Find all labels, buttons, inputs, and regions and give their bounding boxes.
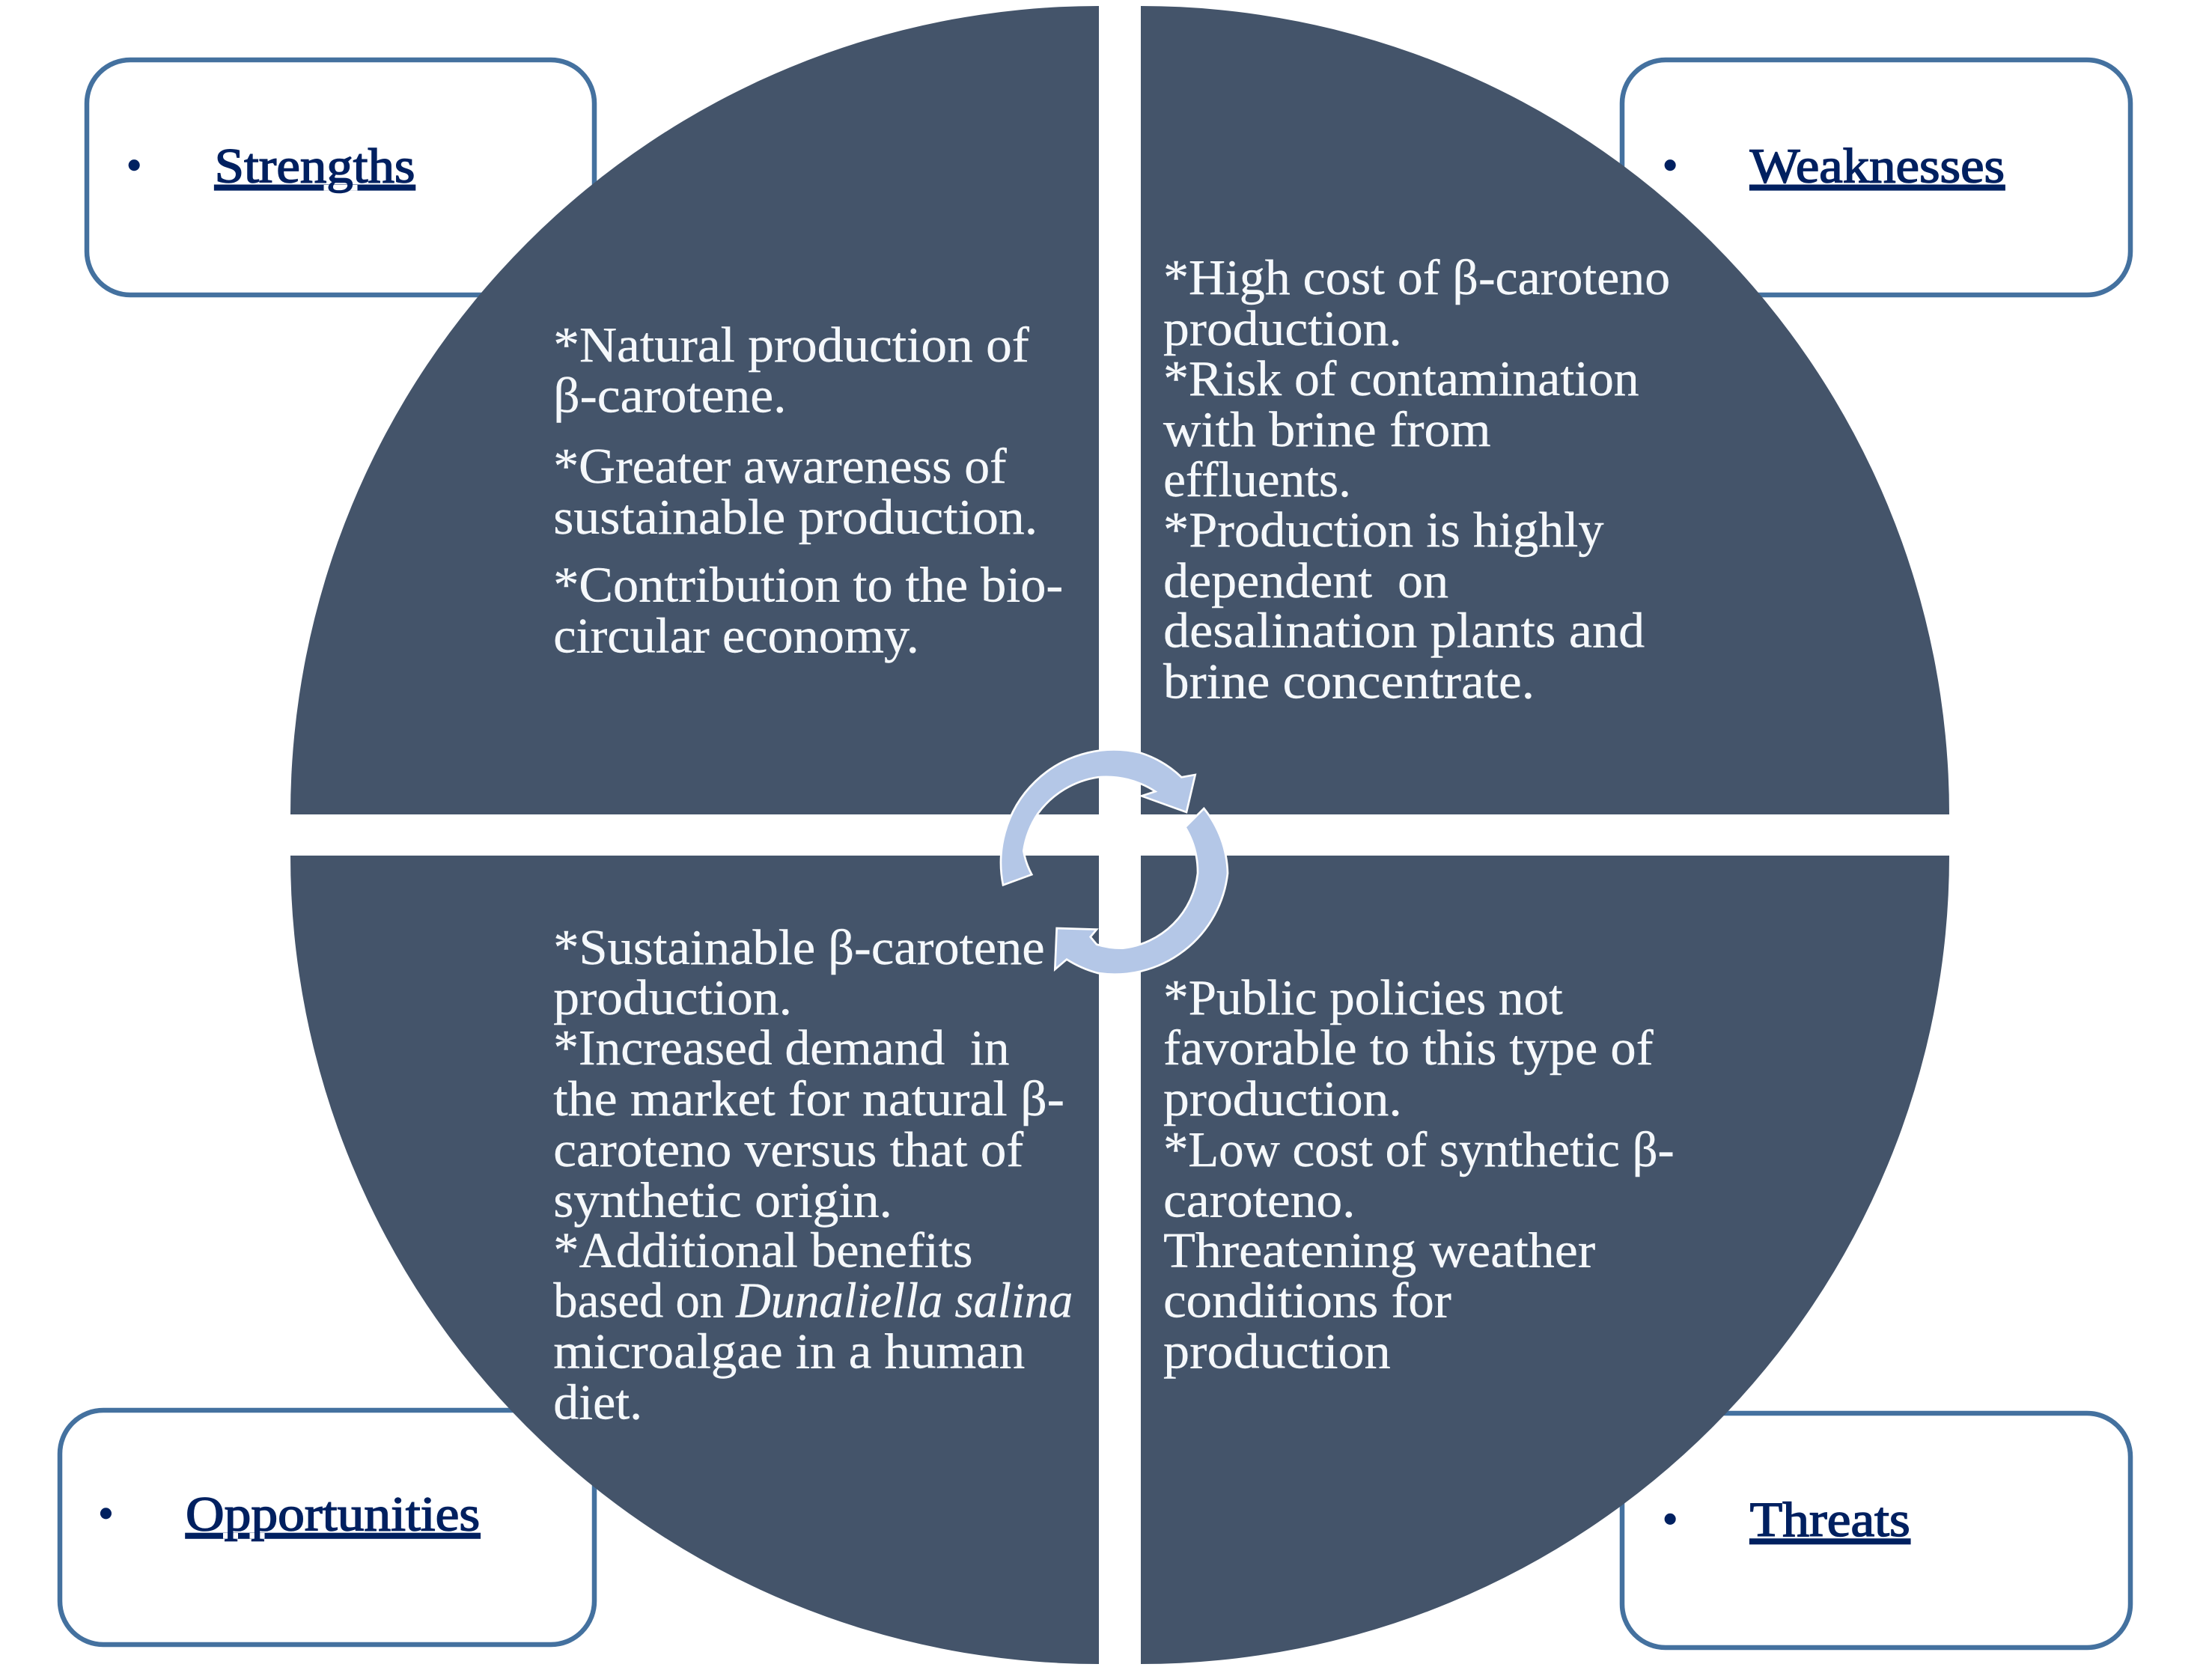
- label: Weaknesses: [1665, 138, 2005, 193]
- text block: Weaknesses items: dependent on: [1163, 553, 1448, 609]
- text block: Weaknesses items: desalination plants and: [1163, 603, 1645, 659]
- text block: Opportunities items: caroteno versus that of: [553, 1122, 1024, 1177]
- text block: Threats items: favorable to this type of: [1163, 1020, 1654, 1076]
- text block: Weaknesses items: brine concentrate.: [1163, 654, 1535, 710]
- text block: Opportunities items: *Additional benefits: [553, 1223, 972, 1279]
- text block: Opportunities items: [553, 920, 1073, 1430]
- label: Threats: Threats: [1750, 1493, 1910, 1547]
- text block: Weaknesses items: [1163, 250, 1670, 710]
- text block: Strengths items: *Greater awareness of: [553, 439, 1007, 494]
- text block: Weaknesses items: production.: [1163, 301, 1402, 356]
- circle quadrant: Strengths panel: [290, 6, 1099, 814]
- text block: Weaknesses items: effluents.: [1163, 452, 1351, 508]
- box: Weaknesses: [1622, 60, 2130, 295]
- text block: Strengths items: [553, 317, 1063, 663]
- text block: Threats items: production.: [1163, 1071, 1402, 1127]
- circle quadrant: Opportunities panel: [290, 856, 1099, 1664]
- text block: Opportunities items: diet.: [553, 1374, 642, 1430]
- text block: Strengths items: sustainable production.: [553, 490, 1038, 545]
- text block: Opportunities items: *Sustainable β-carotene: [553, 920, 1045, 975]
- circle quadrant: Weaknesses panel: [1141, 6, 1949, 814]
- box: Threats: [1622, 1413, 2130, 1648]
- text block: Opportunities items: synthetic origin.: [553, 1173, 892, 1228]
- text block: Weaknesses items: *High cost of β-caroteno: [1163, 250, 1670, 305]
- text block: Strengths items: circular economy.: [553, 608, 919, 663]
- text block: Strengths items: *Natural production of: [553, 317, 1030, 373]
- text block: Opportunities items: based on Dunaliella salina: [553, 1273, 1073, 1329]
- box: Opportunities: [60, 1410, 594, 1645]
- text block: Strengths items: β-carotene.: [553, 368, 787, 424]
- text block: Threats items: [1163, 970, 1675, 1380]
- text block: Threats items: production: [1163, 1324, 1391, 1380]
- text block: Opportunities items: microalgae in a human: [553, 1324, 1025, 1380]
- label: Strengths: [129, 138, 415, 193]
- text block: Weaknesses items: with brine from: [1163, 402, 1491, 457]
- box: Strengths: [87, 60, 594, 295]
- text block: Opportunities items: *Increased demand in: [553, 1020, 1009, 1076]
- label: Threats: [1665, 1493, 1910, 1547]
- label: Strengths: Strengths: [215, 138, 415, 193]
- text block: Threats items: Threatening weather: [1163, 1223, 1595, 1279]
- circle quadrant: Threats panel: [1141, 856, 1949, 1664]
- text block: Threats items: *Low cost of synthetic β-: [1163, 1122, 1675, 1177]
- arrow: lower clockwise arrow: [1055, 808, 1228, 975]
- text block: Threats items: *Public policies not: [1163, 970, 1563, 1026]
- text block: Strengths items: *Contribution to the bio-: [553, 557, 1063, 612]
- text block: Opportunities items: production.: [553, 970, 792, 1026]
- text block: Threats items: conditions for: [1163, 1273, 1451, 1329]
- text block: Threats items: caroteno.: [1163, 1173, 1356, 1228]
- label: Opportunities: Opportunities: [186, 1487, 480, 1541]
- text block: Opportunities items: the market for natural β-: [553, 1071, 1064, 1127]
- arrow: upper clockwise arrow: [1001, 749, 1195, 885]
- text block: Weaknesses items: *Production is highly: [1163, 502, 1604, 558]
- label: Weaknesses: Weaknesses: [1750, 138, 2005, 193]
- center cycle icon: two circular arrows: [1001, 749, 1228, 975]
- text block: Weaknesses items: *Risk of contamination: [1163, 351, 1639, 406]
